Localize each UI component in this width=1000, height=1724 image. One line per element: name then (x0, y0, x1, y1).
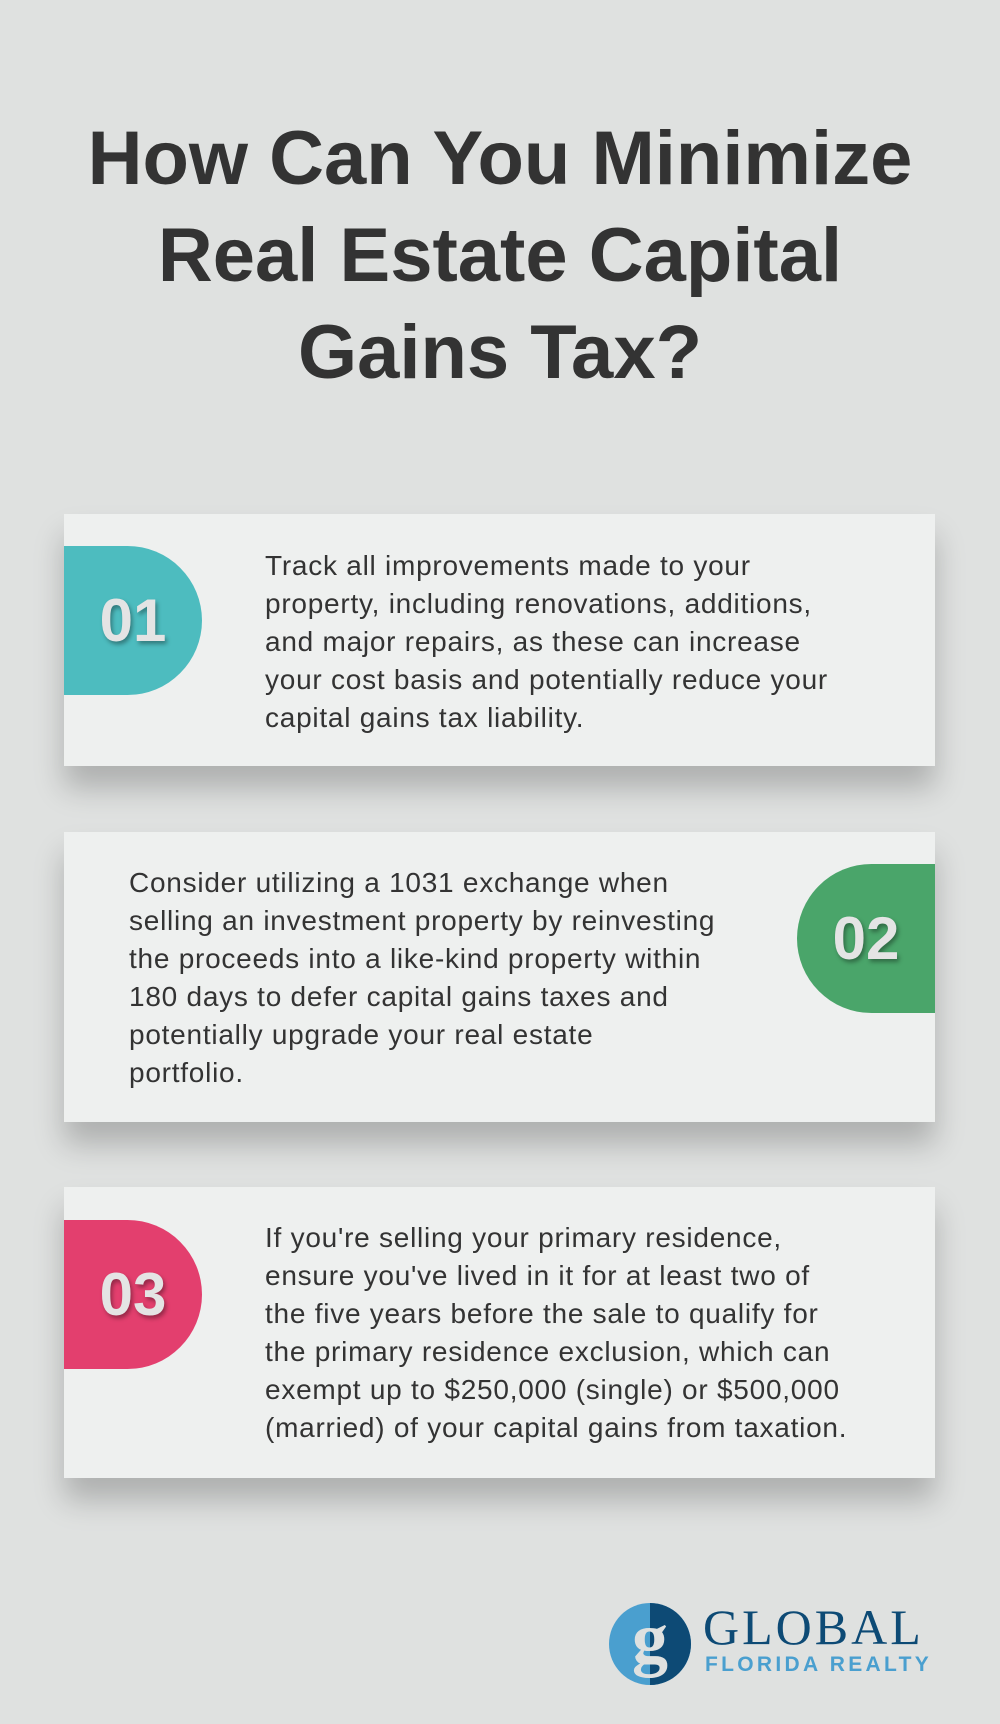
text 01: your cost basis and potentially reduce your (265, 664, 828, 695)
text 03 (265, 1222, 847, 1443)
logo: FLORIDA REALTY (705, 1653, 932, 1676)
title: Gains Tax? (298, 310, 702, 395)
badge 01: 01 (100, 587, 166, 654)
badge 03 (64, 1220, 202, 1369)
badge 02 (797, 864, 935, 1013)
text 02: Consider utilizing a 1031 exchange when (129, 867, 669, 898)
text 03: (married) of your capital gains from taxation. (265, 1412, 847, 1443)
title: How Can You Minimize (88, 116, 912, 201)
text 03: ensure you've lived in it for at least two of (265, 1260, 810, 1291)
text 03: exempt up to $250,000 (single) or $500,000 (265, 1374, 840, 1405)
text 01: property, including renovations, additions, (265, 588, 812, 619)
text 03: the primary residence exclusion, which can (265, 1336, 830, 1367)
text 02: portfolio. (129, 1057, 244, 1088)
text 02: potentially upgrade your real estate (129, 1019, 593, 1050)
text 03: If you're selling your primary residence, (265, 1222, 782, 1253)
text 01: Track all improvements made to your (265, 550, 751, 581)
panel: tip 03 (64, 1187, 935, 1478)
text 02: 180 days to defer capital gains taxes and (129, 981, 669, 1012)
logo text: GLOBAL (703, 1599, 924, 1655)
title: Real Estate Capital (158, 213, 842, 298)
text 02 (129, 867, 715, 1088)
text 01: and major repairs, as these can increase (265, 626, 801, 657)
badge 01 (64, 546, 202, 695)
text 03: the five years before the sale to qualify for (265, 1298, 819, 1329)
badge 03: 03 (100, 1261, 166, 1328)
text 01: capital gains tax liability. (265, 702, 584, 733)
panel: tip 02 (64, 832, 935, 1122)
text 01 (265, 550, 828, 733)
badge 02: 02 (833, 905, 899, 972)
text 02: the proceeds into a like-kind property within (129, 943, 701, 974)
icon: g circle: g (632, 1600, 668, 1678)
panel: tip 01 (64, 514, 935, 766)
logo (609, 1599, 932, 1685)
title (88, 116, 912, 395)
icon: g circle (609, 1600, 691, 1685)
text 02: selling an investment property by reinvesting (129, 905, 715, 936)
